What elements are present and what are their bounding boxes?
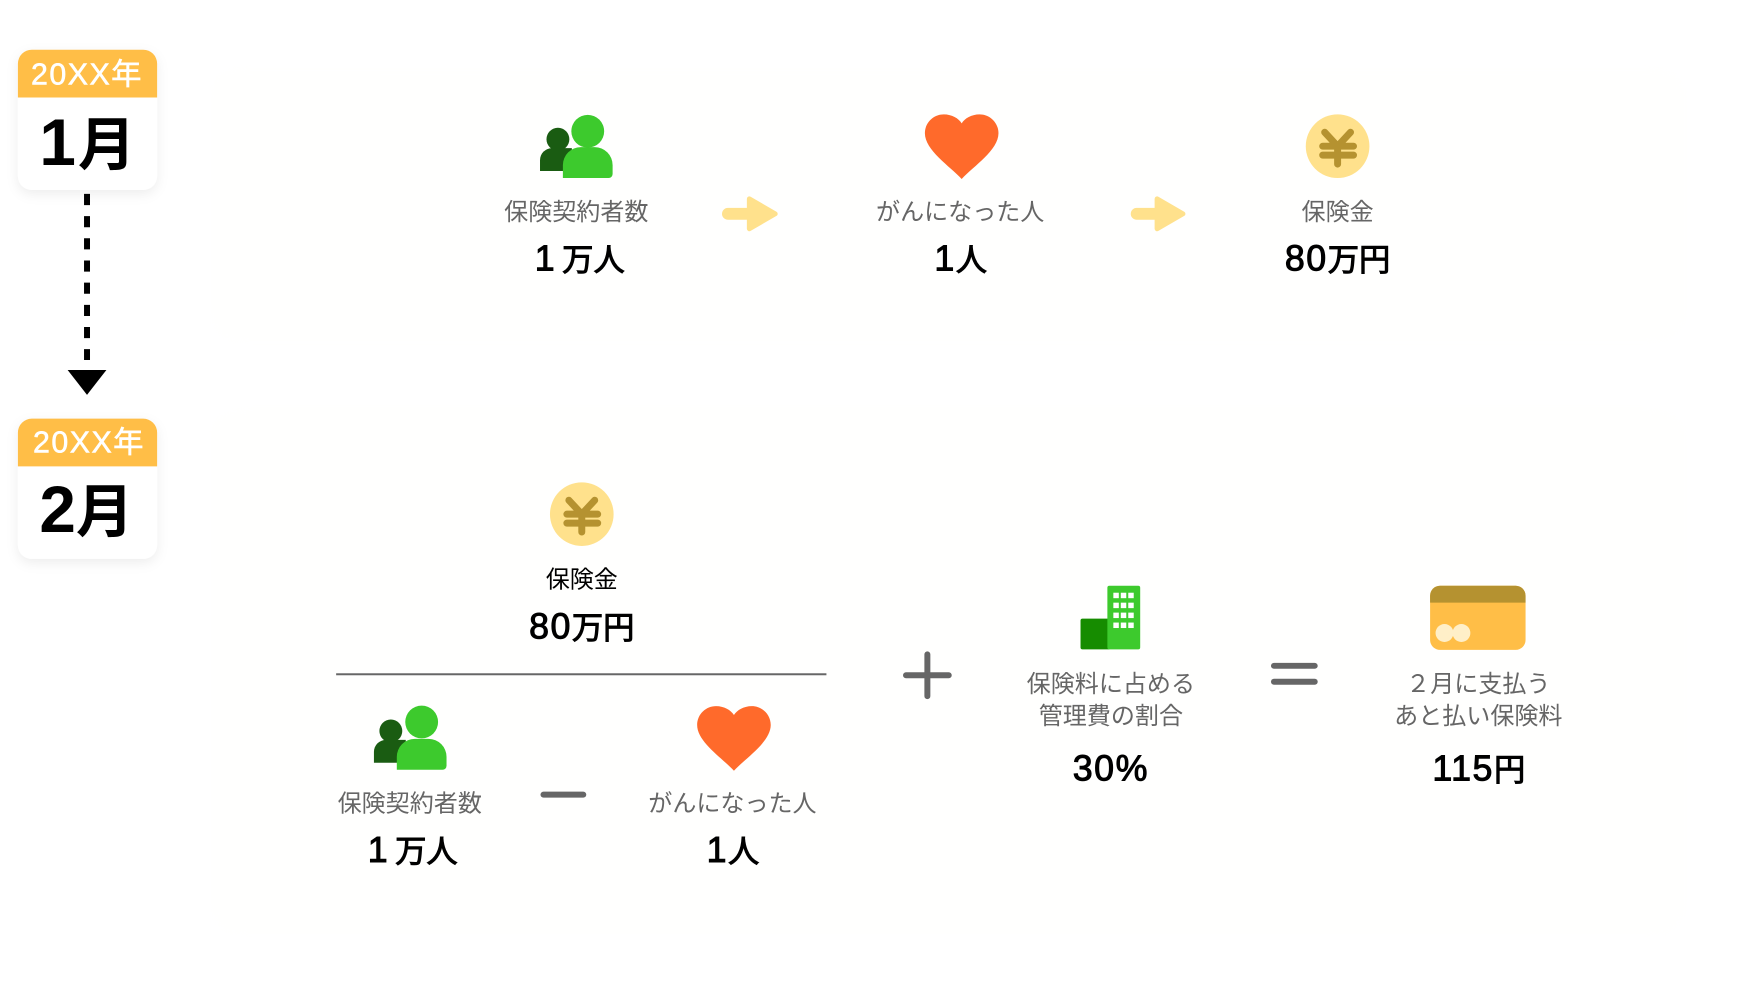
arrow: dashed timeline January to February <box>68 194 106 395</box>
text: policyholder count <box>338 791 482 870</box>
arrow: to cancer cases <box>722 196 778 231</box>
panel: January flow <box>207 65 1689 345</box>
icon: building <box>1081 586 1140 649</box>
icon: plus <box>906 654 949 696</box>
panel: February formula <box>207 406 1689 938</box>
text: payout numerator <box>529 567 635 646</box>
text: admin cost ratio: 保険料に占める <box>1027 671 1195 698</box>
icon: credit card <box>1430 586 1526 650</box>
text: deferred premium: 115円 <box>1432 749 1525 789</box>
text: payout numerator: 80万円 <box>529 606 635 646</box>
text: deferred premium <box>1394 671 1562 789</box>
panel: January calendar <box>18 50 157 190</box>
text: cancer cases: 1人 <box>934 239 987 279</box>
fraction line <box>336 673 826 675</box>
text: payout: 保険金 <box>1302 199 1374 226</box>
text: admin cost ratio: 管理費の割合 <box>1039 703 1183 730</box>
text: cancer cases <box>648 791 817 870</box>
text: cancer cases: がんになった人 <box>648 791 817 818</box>
icon: yen coin <box>1306 114 1369 178</box>
icon: equals <box>1271 663 1318 685</box>
text: cancer cases: 1人 <box>707 830 759 870</box>
panel: February calendar <box>18 419 157 559</box>
icon: heart <box>697 706 771 771</box>
text: policyholder count: 1万人 <box>535 239 625 279</box>
icon: minus <box>541 792 586 798</box>
text: policyholder count <box>504 199 648 279</box>
icon: policyholders <box>374 706 447 770</box>
panel: February calendar: 2月 <box>39 473 134 546</box>
text: admin cost ratio: 30% <box>1073 749 1149 789</box>
text: policyholder count: 1万人 <box>368 830 458 870</box>
text: payout <box>1285 199 1390 279</box>
panel: January calendar: 20XX年 <box>31 58 143 92</box>
text: payout: 80万円 <box>1285 239 1390 279</box>
text: policyholder count: 保険契約者数 <box>338 791 482 818</box>
text: payout numerator: 保険金 <box>546 567 618 594</box>
icon: policyholders <box>540 115 613 178</box>
icon: heart <box>925 114 998 179</box>
text: policyholder count: 保険契約者数 <box>504 199 648 226</box>
icon: yen coin <box>550 482 614 546</box>
text: cancer cases <box>876 199 1044 279</box>
panel: February calendar: 20XX年 <box>33 425 145 459</box>
text: deferred premium: あと払い保険料 <box>1394 703 1562 730</box>
text: cancer cases: がんになった人 <box>876 199 1044 226</box>
text: admin cost ratio <box>1027 671 1195 789</box>
panel: January calendar: 1月 <box>39 106 136 179</box>
arrow: to payout <box>1131 196 1185 231</box>
text: deferred premium: ２月に支払う <box>1406 671 1550 698</box>
